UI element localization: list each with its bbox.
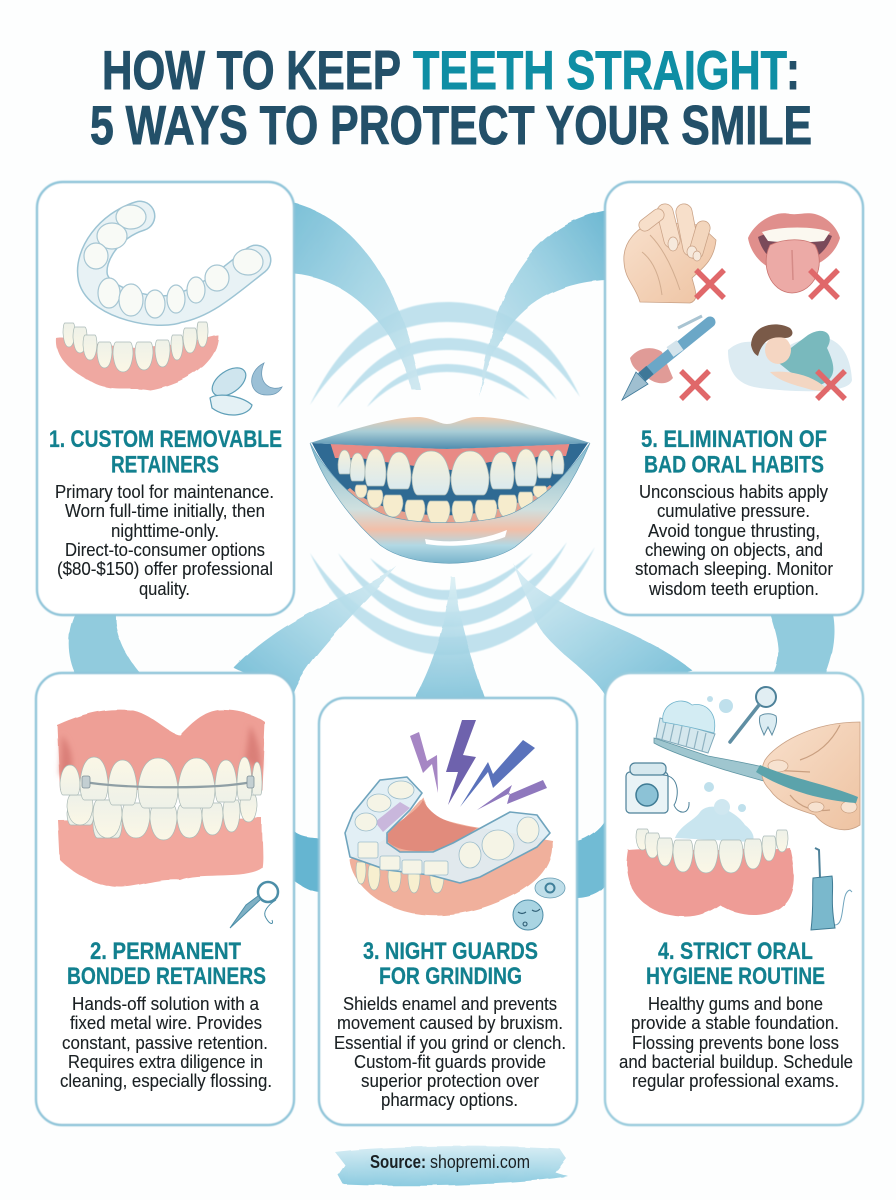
sound-wave arcs above smile bbox=[310, 302, 580, 408]
body text: Unconscious habits apply bbox=[639, 482, 828, 502]
heading bbox=[646, 938, 825, 990]
heading: 4. STRICT ORAL bbox=[658, 938, 813, 965]
icon: dental mirror bbox=[730, 687, 776, 742]
body text: Custom-fit guards provide bbox=[354, 1052, 546, 1072]
body text: Avoid tongue thrusting, bbox=[648, 521, 820, 541]
icon: foam and bubbles bbox=[675, 696, 754, 842]
title: : bbox=[786, 39, 800, 101]
panel: 1 custom removable retainers bbox=[37, 182, 294, 615]
body text: chewing on objects, and bbox=[645, 540, 823, 560]
card frame bbox=[605, 673, 863, 1125]
icon: pen in mouth bbox=[622, 316, 710, 400]
teeth with bonded wire bbox=[57, 710, 265, 887]
icon: hand holding brush bbox=[762, 722, 860, 830]
lower dental arch bbox=[56, 322, 218, 390]
title bbox=[90, 39, 812, 156]
icon: red crosses bbox=[681, 270, 845, 399]
body text: ($80-$150) offer professional bbox=[57, 559, 273, 579]
heading: FOR GRINDING bbox=[379, 963, 522, 990]
central smile illustration bbox=[310, 417, 590, 563]
body text: regular professional exams. bbox=[632, 1071, 839, 1091]
heading: 5. ELIMINATION OF bbox=[641, 426, 827, 453]
heading bbox=[67, 938, 266, 990]
watercolor ribbons connecting smile to cards bbox=[69, 202, 835, 898]
body text bbox=[55, 482, 274, 599]
icon: hand with bitten nails bbox=[624, 212, 716, 303]
card frame bbox=[319, 698, 577, 1125]
body text: Flossing prevents bone loss bbox=[632, 1033, 839, 1053]
icon: moon bbox=[252, 363, 282, 395]
source banner bbox=[335, 1146, 568, 1185]
body text: fixed metal wire. Provides bbox=[70, 1013, 262, 1033]
card frame bbox=[37, 182, 294, 615]
title: HOW TO KEEP bbox=[102, 39, 401, 101]
body text: pharmacy options. bbox=[381, 1090, 518, 1110]
upper lip bbox=[310, 417, 590, 449]
heading: RETAINERS bbox=[111, 452, 219, 478]
body text: Shields enamel and prevents bbox=[343, 994, 557, 1014]
source text: Source: bbox=[370, 1152, 426, 1172]
body text: constant, passive retention. bbox=[62, 1033, 268, 1053]
source text: shopremi.com bbox=[430, 1152, 530, 1172]
body text: Essential if you grind or clench. bbox=[334, 1033, 566, 1053]
card frame bbox=[605, 182, 863, 615]
body text: wisdom teeth eruption. bbox=[648, 579, 819, 599]
body text: Worn full-time initially, then bbox=[65, 501, 265, 521]
body text bbox=[619, 994, 853, 1091]
body text: nighttime-only. bbox=[111, 521, 219, 541]
heading: BONDED RETAINERS bbox=[67, 963, 266, 990]
panel: 4 strict oral hygiene routine bbox=[605, 673, 863, 1125]
heading: 2. PERMANENT bbox=[90, 938, 241, 965]
body text: quality. bbox=[139, 579, 190, 599]
lower dental arch bbox=[627, 829, 794, 917]
icon: lightning bolts bbox=[410, 720, 547, 810]
sound-wave arcs below smile bbox=[310, 542, 595, 655]
body text: provide a stable foundation. bbox=[631, 1013, 839, 1033]
panel: 2 permanent bonded retainers bbox=[36, 673, 294, 1125]
body text bbox=[60, 994, 272, 1091]
heading: 3. NIGHT GUARDS bbox=[363, 938, 538, 965]
body text bbox=[334, 994, 566, 1110]
panel: 5 elimination of bad oral habits bbox=[605, 182, 863, 615]
body text: cumulative pressure. bbox=[657, 501, 810, 521]
body text: Primary tool for maintenance. bbox=[55, 482, 274, 502]
body text: Healthy gums and bone bbox=[648, 994, 823, 1014]
panel: 3 night guards for grinding bbox=[319, 698, 577, 1125]
lower lip bbox=[310, 443, 590, 563]
heading: HYGIENE ROUTINE bbox=[646, 963, 825, 990]
brush handle over hand bbox=[756, 765, 858, 803]
icon: floss box bbox=[626, 763, 689, 813]
heading: BAD ORAL HABITS bbox=[644, 452, 824, 478]
heading: 1. CUSTOM REMOVABLE bbox=[49, 426, 282, 453]
icon: tongue thrust mouth bbox=[748, 213, 840, 293]
icon: water flosser bbox=[811, 848, 852, 930]
body text: Requires extra diligence in bbox=[68, 1052, 263, 1072]
night guard on arch bbox=[345, 777, 552, 915]
card frame bbox=[36, 673, 294, 1125]
title: TEETH STRAIGHT bbox=[413, 39, 787, 101]
body text: Hands-off solution with a bbox=[72, 994, 260, 1014]
icon: small tooth bbox=[759, 714, 777, 735]
body text: superior protection over bbox=[361, 1071, 539, 1091]
heading bbox=[49, 426, 282, 478]
body text: movement caused by bruxism. bbox=[337, 1013, 563, 1033]
heading bbox=[641, 426, 827, 478]
body text bbox=[635, 482, 833, 599]
icon: stomach sleeper bbox=[728, 324, 852, 392]
body text: cleaning, especially flossing. bbox=[60, 1071, 272, 1091]
teeth and gums bbox=[330, 444, 570, 522]
lip highlight bbox=[425, 530, 507, 546]
icon: retainer case bbox=[207, 362, 252, 415]
icon: floss pick bbox=[230, 882, 278, 928]
icon: sleeping face with thought bubble bbox=[513, 878, 565, 930]
mouth interior bbox=[312, 443, 588, 523]
icon: toothbrush with paste bbox=[654, 701, 858, 802]
body text: and bacterial buildup. Schedule bbox=[619, 1052, 853, 1072]
body text: stomach sleeping. Monitor bbox=[635, 559, 833, 579]
heading bbox=[363, 938, 538, 990]
body text: Direct-to-consumer options bbox=[65, 540, 265, 560]
clear aligner tray bbox=[84, 205, 263, 318]
